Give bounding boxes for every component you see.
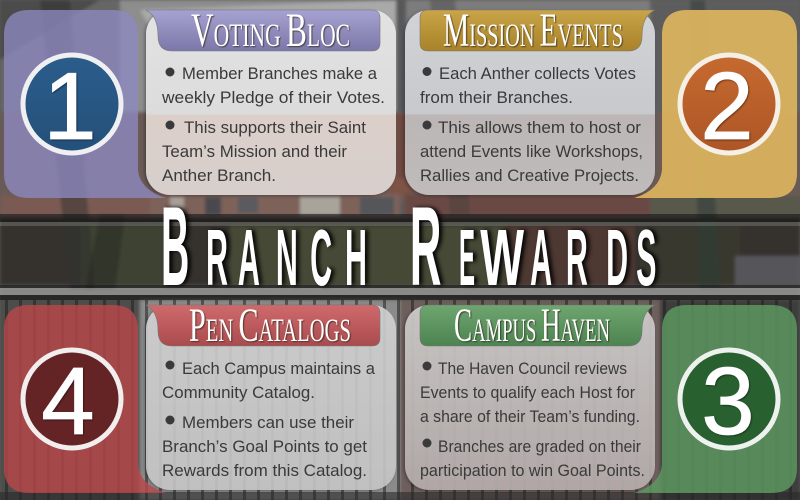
text card 3 <box>405 305 655 490</box>
text block: voting bloc: Member Branches make a <box>182 65 378 83</box>
header: pen catalogs <box>146 305 380 346</box>
text block: mission events: from their Branches. <box>420 89 573 107</box>
number block 1 <box>4 10 166 198</box>
text block: voting bloc: weekly Pledge of their Votes. <box>161 89 385 107</box>
number badge 1 <box>23 53 121 160</box>
text block: campus haven: a share of their Team’s funding. <box>420 408 640 426</box>
number badge 3 <box>680 348 778 455</box>
text block: pen catalogs: Each Campus maintains a <box>182 360 376 378</box>
number block 4 <box>4 305 166 493</box>
title: R <box>410 185 441 310</box>
text block: pen catalogs <box>162 360 376 480</box>
text card 1 <box>146 10 396 195</box>
number block 3 <box>634 305 797 493</box>
text block: campus haven <box>420 360 645 480</box>
header: mission events <box>420 10 655 51</box>
title: B <box>161 184 189 309</box>
header: campus haven <box>420 305 655 346</box>
text block: voting bloc: Anther Branch. <box>162 167 276 185</box>
number badge 2: 2 <box>700 53 754 160</box>
text block: voting bloc <box>161 65 385 185</box>
heading: campus haven: CAMPUS HAVEN <box>454 299 610 352</box>
text block: voting bloc: This supports their Saint <box>184 119 366 137</box>
number block 2 <box>634 10 797 198</box>
text block: mission events: attend Events like Workshops, <box>420 143 643 161</box>
title: W <box>480 213 524 302</box>
header: voting bloc <box>146 10 380 51</box>
text block: mission events: This allows them to host or <box>438 119 642 137</box>
text block: pen catalogs: Rewards from this Catalog. <box>162 462 367 480</box>
text block: campus haven: Events to qualify each Host for <box>420 384 635 402</box>
text block: pen catalogs: Members can use their <box>182 414 355 432</box>
number badge 2 <box>680 53 778 160</box>
panel: step 1 voting bloc <box>4 4 396 198</box>
text block: voting bloc: Team’s Mission and their <box>162 143 348 161</box>
number badge 1: 1 <box>43 53 97 160</box>
text block: campus haven: Branches are graded on their <box>438 438 641 456</box>
text block: campus haven: participation to win Goal Points. <box>420 462 645 480</box>
panel: step 4 pen catalogs <box>4 299 396 493</box>
text block: mission events: Rallies and Creative Projects. <box>420 167 639 185</box>
panel: step 2 mission events <box>405 4 797 198</box>
heading: mission events: MISSION EVENTS <box>443 4 623 57</box>
title band <box>0 214 800 300</box>
title: ARDS <box>530 212 656 302</box>
text block: pen catalogs: Branch’s Goal Points to get <box>162 438 367 456</box>
text block: pen catalogs: Community Catalog. <box>162 384 315 402</box>
title: RANCH <box>206 212 367 302</box>
panel: step 3 campus haven <box>405 299 797 493</box>
heading: pen catalogs: PEN CATALOGS <box>189 299 351 352</box>
title <box>161 184 656 310</box>
title: E <box>459 213 475 303</box>
text card 2 <box>405 10 655 195</box>
text block: campus haven: The Haven Council reviews <box>438 360 627 378</box>
text block: mission events <box>420 65 643 185</box>
number badge 4 <box>23 348 121 455</box>
number badge 4: 4 <box>41 348 95 455</box>
number badge 3: 3 <box>701 348 755 455</box>
text card 4 <box>146 305 396 490</box>
text block: mission events: Each Anther collects Votes <box>439 65 636 83</box>
heading: voting bloc: VOTING BLOC <box>191 4 350 57</box>
